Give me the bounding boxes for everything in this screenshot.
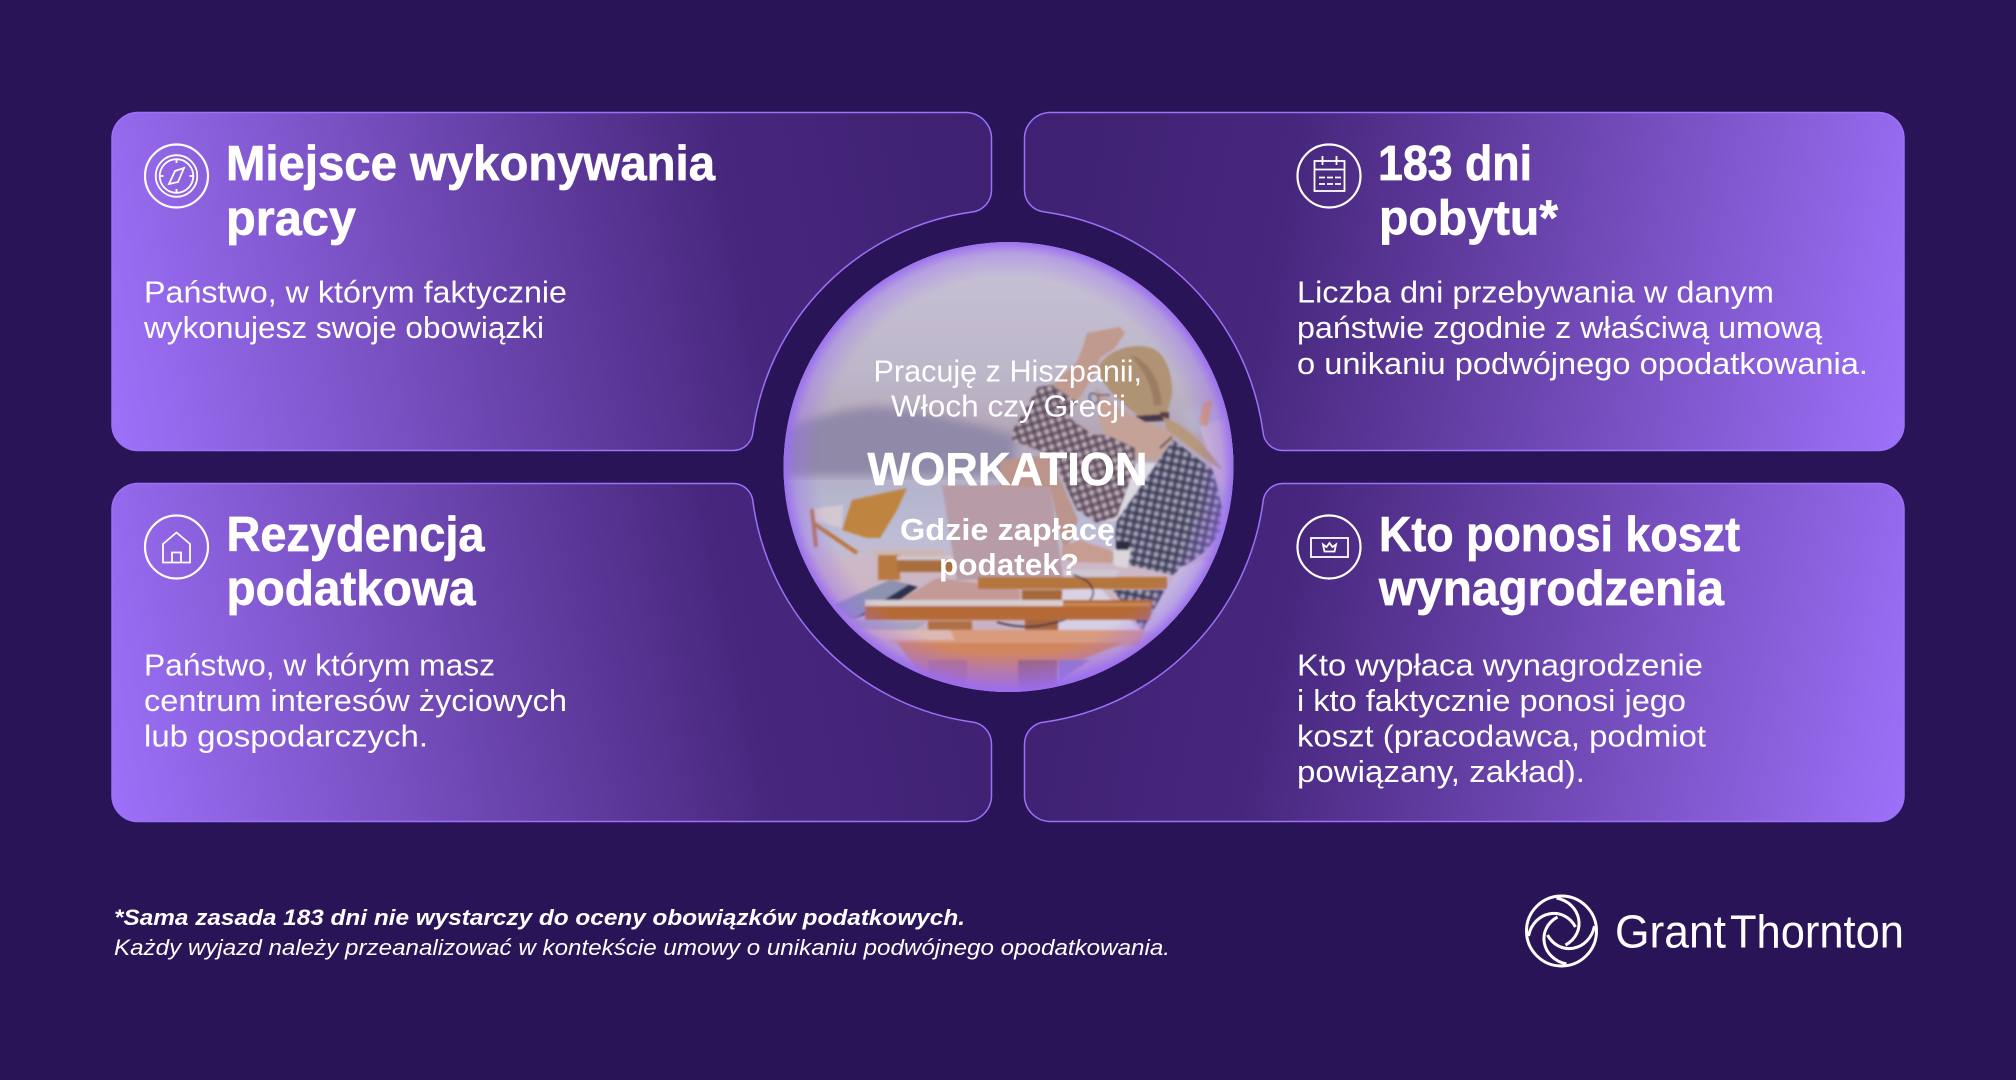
body text: koszt (pracodawca, podmiot xyxy=(1297,720,1707,754)
bottom table xyxy=(860,630,1145,646)
heading: Miejsce wykonywania xyxy=(226,137,716,191)
logo mark xyxy=(1526,896,1596,966)
trousers xyxy=(1058,588,1143,633)
upper table xyxy=(978,577,1167,589)
photo: woman working on laptop at beach xyxy=(780,242,1240,695)
center intro text xyxy=(874,354,1142,424)
center title: WORKATION: WORKATION xyxy=(868,443,1148,495)
panel shape bottom right xyxy=(1024,483,1904,822)
icon: banknote with crown xyxy=(1298,516,1360,578)
body text: Państwo, w którym masz xyxy=(144,648,495,682)
heading: wynagrodzenia xyxy=(1378,562,1725,616)
necklace xyxy=(1160,437,1172,448)
tablet xyxy=(833,580,908,620)
body text xyxy=(1297,648,1707,789)
hair xyxy=(1097,346,1172,417)
footnote: *Sama zasada 183 dni nie wystarczy do oceny obowiązków podatkowych. xyxy=(114,905,965,930)
body text: i kto faktycznie ponosi jego xyxy=(1297,684,1686,718)
keyboard xyxy=(1063,570,1120,578)
tee xyxy=(1095,463,1157,523)
panel: Miejsce wykonywania pracy xyxy=(112,112,992,451)
footnote: Każdy wyjazd należy przeanalizować w kontekście umowy o unikaniu podwójnego opodatkowania. xyxy=(114,935,1170,960)
logo wordmark: Thornton xyxy=(1730,906,1904,958)
heading: podatkowa xyxy=(226,562,476,616)
body text: lub gospodarczych. xyxy=(144,720,428,754)
icon: compass xyxy=(145,144,208,208)
heading: 183 dni xyxy=(1378,137,1532,191)
raised sleeve xyxy=(1012,385,1135,523)
body text: centrum interesów życiowych xyxy=(144,684,567,718)
body text xyxy=(1297,276,1868,381)
heading: Kto ponosi koszt xyxy=(1379,508,1740,562)
laptop xyxy=(942,485,1063,580)
right chair xyxy=(1200,417,1235,495)
logo wordmark xyxy=(1615,906,1904,958)
lounge chair xyxy=(842,488,907,538)
lower legs xyxy=(928,621,972,633)
body text xyxy=(144,648,567,754)
logo: Grant Thornton xyxy=(1526,896,1904,966)
body text: Państwo, w którym faktycznie xyxy=(144,276,567,310)
body text: Kto wypłaca wynagrodzenie xyxy=(1297,648,1703,682)
body text: powiązany, zakład). xyxy=(1297,755,1585,789)
panel shape top left xyxy=(112,112,992,451)
upper arm xyxy=(1000,455,1078,555)
center intro text: Pracuję z Hiszpanii, xyxy=(874,354,1142,388)
body text: wykonujesz swoje obowiązki xyxy=(143,311,544,345)
footnote xyxy=(114,905,1170,960)
heading xyxy=(1378,137,1559,246)
cushion xyxy=(1142,562,1210,635)
heading: pobytu* xyxy=(1379,192,1559,246)
center question: podatek? xyxy=(939,547,1079,582)
center question xyxy=(900,512,1115,582)
glasses xyxy=(1090,393,1110,404)
central circle with photo and text xyxy=(780,242,1240,695)
icon: house xyxy=(145,516,208,578)
center intro text: Włoch czy Grecji xyxy=(891,388,1126,424)
panel: Kto ponosi koszt wynagrodzenia xyxy=(1024,483,1904,822)
panel shape bottom left xyxy=(112,483,992,822)
cables xyxy=(997,575,1093,627)
logo wordmark: Grant xyxy=(1615,906,1726,958)
body text: Liczba dni przebywania w danym xyxy=(1297,276,1774,310)
hand on keyboard xyxy=(1062,540,1115,563)
knee xyxy=(900,578,1020,600)
book xyxy=(853,620,927,631)
heading: Rezydencja xyxy=(226,508,485,562)
panel shape top right xyxy=(1024,112,1904,451)
panel: 183 dni pobytu xyxy=(1024,112,1904,451)
center question: Gdzie zapłacę xyxy=(900,512,1115,547)
shirt xyxy=(1115,440,1222,575)
body text xyxy=(143,276,567,345)
body text: o unikaniu podwójnego opodatkowania. xyxy=(1297,347,1868,381)
face and neck xyxy=(1095,387,1175,460)
middle table xyxy=(865,600,1153,620)
heading xyxy=(226,508,485,616)
heading: pracy xyxy=(226,192,356,246)
raised arm xyxy=(1052,327,1125,402)
body text: państwie zgodnie z właściwą umową xyxy=(1297,311,1822,345)
heading xyxy=(1378,508,1740,616)
icon: calendar xyxy=(1298,144,1360,208)
panel: Rezydencja podatkowa xyxy=(112,483,992,822)
heading xyxy=(226,137,716,246)
